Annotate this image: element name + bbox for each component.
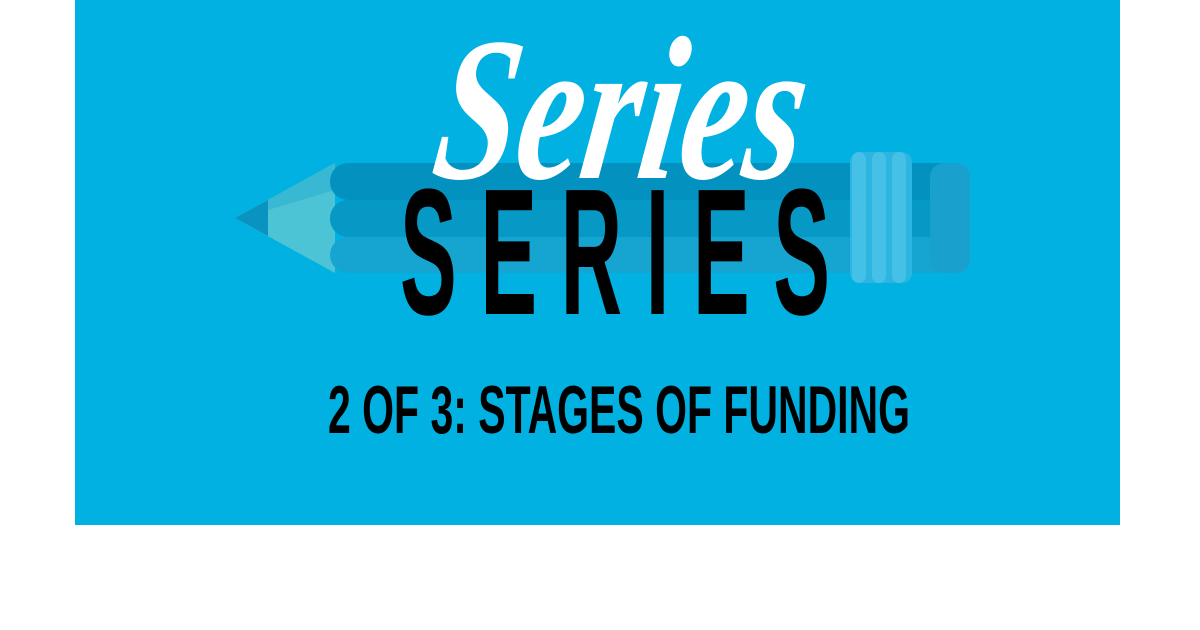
panel: blue background [75,0,1120,525]
heading: Series script: Series [423,0,823,223]
icon: pencil [235,152,970,283]
